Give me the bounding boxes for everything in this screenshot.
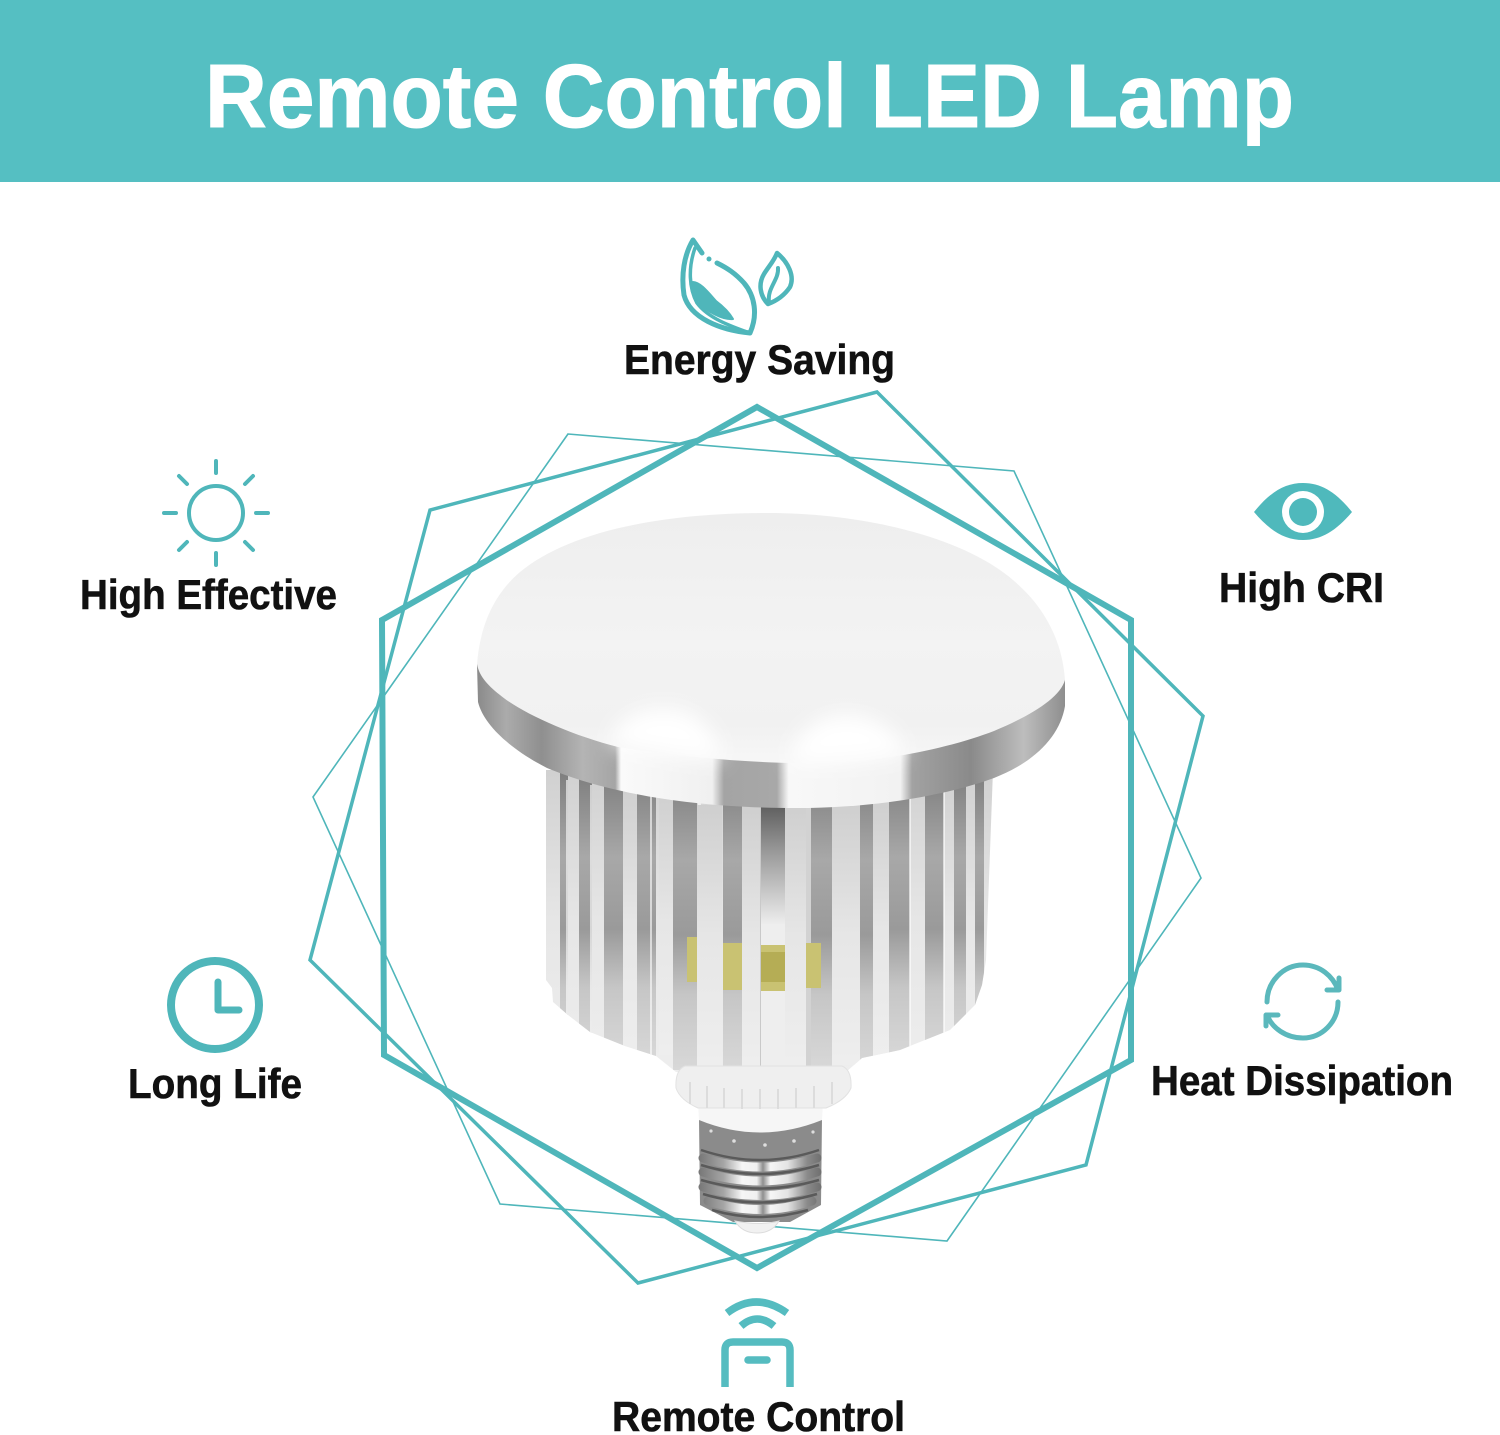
icon: clock <box>171 961 259 1049</box>
socket tip <box>735 1221 779 1233</box>
LED lamp <box>477 513 1065 1233</box>
white neck <box>698 1103 823 1132</box>
inner yellow driver <box>687 937 821 991</box>
icon: sun <box>164 461 268 565</box>
screw socket <box>699 1118 822 1233</box>
plastic collar <box>676 1066 851 1109</box>
icon: eye <box>1254 483 1352 540</box>
label: Long Life <box>128 1060 302 1107</box>
feature: Long Life <box>128 961 302 1107</box>
hexagon frames <box>310 392 1203 1283</box>
icon: leaves <box>683 240 792 333</box>
label: High Effective <box>80 571 337 618</box>
frosted dome <box>477 513 1065 763</box>
silver rim <box>477 664 1065 808</box>
feature: Heat Dissipation <box>1151 965 1453 1104</box>
label: High CRI <box>1219 564 1384 611</box>
feature: High Effective <box>80 461 337 618</box>
feature: Remote Control <box>612 1302 905 1435</box>
label: Heat Dissipation <box>1151 1057 1453 1104</box>
icon: refresh arrows <box>1266 965 1339 1038</box>
header band <box>0 0 1500 182</box>
feature: Energy Saving <box>624 240 895 383</box>
title: Remote Control LED Lamp <box>205 47 1294 147</box>
icon: remote with signal <box>725 1302 790 1387</box>
heat sink fins <box>540 760 1000 1080</box>
label: Energy Saving <box>624 336 895 383</box>
dome highlights <box>610 708 905 763</box>
feature: High CRI <box>1219 483 1384 611</box>
